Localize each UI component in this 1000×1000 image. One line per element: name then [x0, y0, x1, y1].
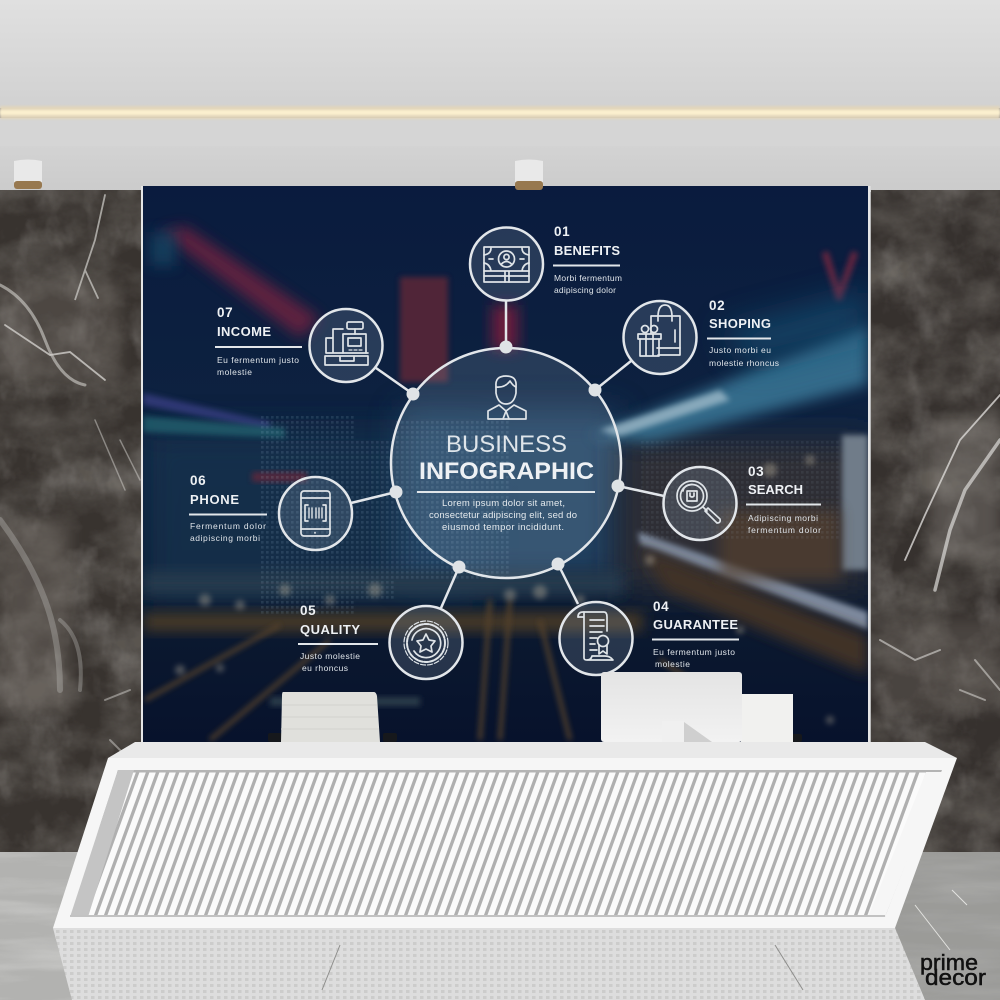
city glow shapes [143, 226, 870, 740]
text 02: Justo morbi eu [709, 345, 771, 355]
text 07: 07 [217, 305, 233, 320]
text 04: 04 [653, 599, 669, 614]
text 07: molestie [217, 367, 252, 377]
desk top [108, 742, 957, 758]
text 03: Adipiscing morbi [748, 513, 818, 523]
ceiling spot light right [515, 160, 543, 190]
ceiling [0, 0, 1000, 192]
text 07: Eu fermentum justo [217, 355, 299, 365]
panel: city photo backdrop [143, 186, 870, 742]
satellite circle 05 [390, 606, 462, 679]
icon: cash register [325, 322, 368, 365]
text 04: Eu fermentum justo [653, 647, 735, 657]
ceiling light strip [0, 106, 1000, 119]
text 06: Fermentum dolor [190, 521, 266, 531]
text 06: 06 [190, 473, 206, 488]
satellite circle 02 [624, 301, 696, 374]
satellite circle 04 [560, 602, 632, 675]
text 01: BENEFITS [554, 243, 620, 258]
text 01 [553, 224, 622, 295]
text 07 [215, 305, 302, 377]
text 03 [746, 464, 821, 535]
reception desk [0, 742, 1000, 928]
hub description: eiusmod tempor incididunt. [442, 522, 564, 533]
monitor [601, 672, 742, 742]
text 06: PHONE [190, 492, 239, 507]
office chair right [741, 694, 802, 742]
heading: infographic: INFOGRAPHIC [419, 458, 594, 485]
text 03: fermentum dolor [748, 525, 821, 535]
hub description: Lorem ipsum dolor sit amet, [442, 498, 565, 509]
office chair left [268, 692, 397, 742]
connector nodes [390, 340, 624, 574]
bokeh lights [175, 455, 834, 724]
text 03: 03 [748, 464, 764, 479]
item 04 guarantee [560, 599, 739, 675]
hub description: consectetur adipiscing elit, sed do [429, 510, 577, 521]
desk floor reflection [53, 928, 925, 1000]
icon: phone barcode [301, 491, 330, 536]
logo: prime [920, 950, 978, 975]
satellite circle 07 [310, 309, 382, 382]
hub divider [417, 491, 595, 493]
icon: magnifier with bag [677, 481, 720, 523]
icon: star badge [404, 621, 448, 665]
text 02: 02 [709, 298, 725, 313]
satellite circle 03 [664, 467, 736, 540]
item 07 income [215, 305, 382, 382]
infographic hub [351, 301, 664, 608]
left marble wall [0, 190, 141, 854]
panel frame edges [141, 186, 870, 742]
text 02 [707, 298, 779, 368]
text 04: molestie [655, 659, 690, 669]
text 06: adipiscing morbi [190, 533, 260, 543]
text 05 [298, 603, 378, 673]
logo: decor [925, 965, 986, 990]
item 03 search [664, 464, 821, 540]
connector lines [351, 301, 664, 608]
satellite circle 01 [470, 228, 543, 300]
icon: gift and bag [638, 305, 680, 356]
text 04: GUARANTEE [653, 617, 738, 632]
hub description [429, 498, 577, 533]
text 01: Morbi fermentum [554, 273, 622, 283]
text 04 [652, 599, 739, 669]
text 05: eu rhoncus [302, 663, 348, 673]
text 05: QUALITY [300, 622, 360, 637]
text 05: 05 [300, 603, 316, 618]
text 06 [189, 473, 267, 543]
item 05 quality [298, 603, 462, 679]
text 05: Justo molestie [300, 651, 360, 661]
text 07: INCOME [217, 324, 271, 339]
desk front frame [53, 758, 957, 928]
icon: banknote [484, 247, 529, 282]
heading: business: BUSINESS [446, 431, 567, 458]
item 06 phone [189, 473, 352, 550]
desk side shadow [70, 770, 134, 917]
icon: certificate scroll [578, 612, 613, 660]
text 02: SHOPING [709, 316, 771, 331]
building windows [260, 415, 840, 615]
central circle [391, 348, 621, 578]
item 01 benefits [470, 224, 622, 300]
floor [0, 852, 1000, 1000]
item 02 shoping [624, 298, 779, 374]
logo [920, 950, 986, 990]
satellite circle 06 [279, 477, 352, 550]
icon: businessman [488, 376, 526, 419]
text 03: SEARCH [748, 482, 803, 497]
desk striped panel [94, 772, 926, 917]
text 02: molestie rhoncus [709, 358, 779, 368]
right marble wall [871, 190, 1000, 854]
text 01: adipiscing dolor [554, 285, 616, 295]
text 01: 01 [554, 224, 570, 239]
ceiling spot light left [14, 160, 42, 189]
